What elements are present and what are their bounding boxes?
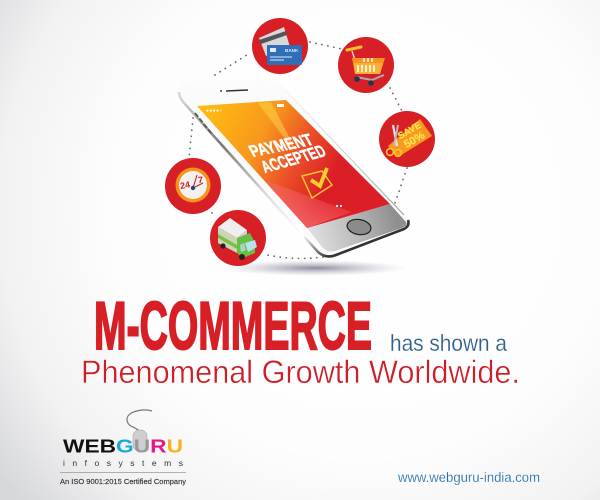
- screen lower highlight: [264, 180, 352, 228]
- icon: mouse: [133, 430, 147, 451]
- screen: [197, 100, 390, 228]
- camera dot: [220, 90, 222, 92]
- logo subtitle: infosystems: [63, 458, 183, 468]
- check box icon: [302, 168, 332, 198]
- icon: save 50% tag: [379, 111, 435, 167]
- phone: [179, 80, 408, 256]
- logo rule: [60, 472, 186, 474]
- phone body: [179, 80, 407, 255]
- page dots: [336, 205, 338, 207]
- status dots: ●●●●○: [206, 108, 223, 114]
- phone edge: [179, 92, 408, 256]
- icon: bank cards: BANK: [285, 48, 299, 53]
- website url: www.webguru-india.com: [397, 470, 540, 485]
- phone shadow: [223, 260, 407, 276]
- icon: 24/7 clock: [165, 158, 221, 214]
- side buttons: [195, 113, 212, 134]
- headline: has shown a: has shown a: [390, 330, 507, 356]
- home button: [346, 218, 372, 236]
- icon: delivery truck: [210, 210, 266, 266]
- icon: shopping cart: [338, 37, 394, 93]
- logo: [60, 410, 186, 486]
- headline: M-COMMERCE: M-COMMERCE: [94, 288, 372, 364]
- payment accepted text: ACCEPTED: [257, 141, 329, 176]
- icon: save 50% tag: SAVE: [396, 120, 423, 142]
- screen glare: [258, 102, 296, 150]
- payment accepted text: [245, 130, 329, 176]
- payment accepted text: PAYMENT: [245, 130, 317, 160]
- dotted orbit: [189, 42, 407, 258]
- icon: mouse cable: [127, 410, 152, 432]
- icon: bank cards: [252, 18, 308, 74]
- icon: 24/7 clock: 7: [198, 175, 203, 185]
- speaker: [226, 90, 248, 91]
- icon: 24/7 clock: 24: [179, 179, 191, 191]
- ISO statement: An ISO 9001:2015 Certified Company: [60, 477, 186, 486]
- headline: Phenomenal Growth Worldwide.: Phenomenal Growth Worldwide.: [81, 354, 520, 390]
- icon: save 50% tag: 50%: [402, 130, 427, 151]
- lower bezel: [307, 204, 406, 252]
- logo wordmark: WEB GURU: [63, 436, 183, 456]
- battery: [277, 104, 284, 107]
- phone right rim: [285, 90, 404, 215]
